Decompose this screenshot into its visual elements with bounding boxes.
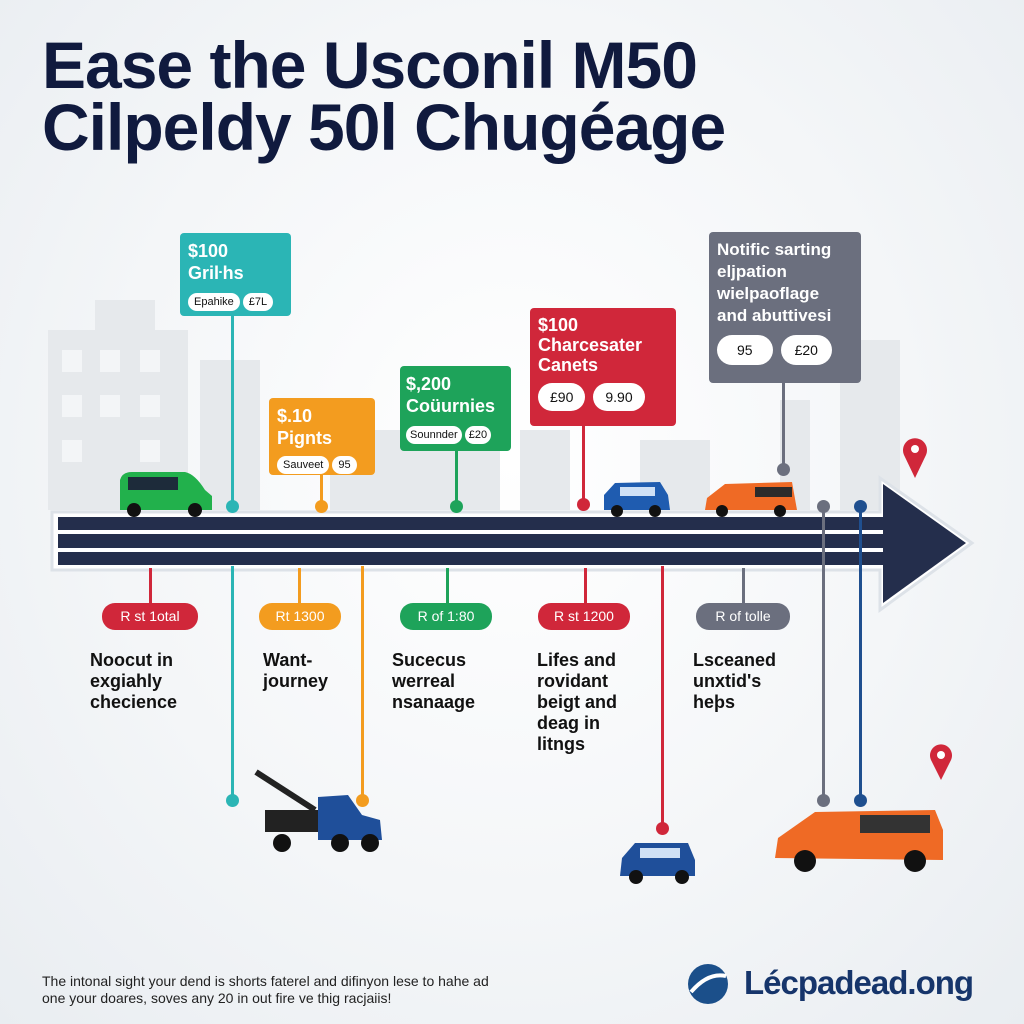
labels	[102, 603, 198, 630]
callout: teal: Epahike	[194, 296, 234, 308]
callout: red: $100	[538, 315, 578, 335]
footer text	[42, 973, 489, 1006]
text: deag in	[537, 713, 600, 733]
text: R of 1:80	[418, 608, 474, 624]
callout: green: $,200	[406, 374, 451, 394]
icon: orange van bottom	[775, 810, 943, 872]
footer text: one your doares, soves any 20 in out fire ve thig racjaiis!	[42, 990, 391, 1006]
callout: red: £90	[550, 389, 573, 405]
text blocks: exgiahly	[90, 671, 162, 691]
icon: orange van	[705, 482, 797, 517]
callout: teal	[180, 233, 291, 316]
icon: map pin bottom	[930, 744, 952, 780]
callout: gray: 95	[737, 342, 753, 358]
icon: tow truck	[256, 772, 382, 852]
footer text: The intonal sight your dend is shorts faterel and difinyon lese to hahe ad	[42, 973, 489, 989]
text: Sucecus	[392, 650, 466, 670]
title: Ease the Usconil M50	[42, 28, 697, 102]
icon: green van	[120, 472, 212, 517]
text: Want-	[263, 650, 312, 670]
icon: map pin top	[903, 438, 927, 478]
callout: green: £20	[469, 429, 487, 441]
text: Lsceaned	[693, 650, 776, 670]
callout: gray: Notific sarting	[717, 240, 831, 259]
text: Lifes and	[537, 650, 616, 670]
text: journey	[263, 671, 328, 691]
text: beigt and	[537, 692, 617, 712]
callout: teal: Griŀhs	[188, 263, 244, 283]
text: R of tolle	[715, 608, 771, 624]
callout: red: Canets	[538, 355, 598, 375]
text blocks	[90, 650, 177, 712]
callout: green	[400, 366, 511, 451]
text: nsanaage	[392, 692, 475, 712]
callout: gray	[709, 232, 861, 383]
callout: green: Coüurnies	[406, 396, 495, 416]
callout: red: Charcesater	[538, 335, 642, 355]
callout: orange: $.10	[277, 406, 312, 426]
callout: gray: and abuttivesi	[717, 306, 831, 325]
road arrow	[50, 476, 974, 613]
text: litngs	[537, 734, 585, 754]
logo: Lécpadead.ong	[744, 964, 973, 1001]
text: Rt 1300	[275, 608, 325, 624]
text blocks: checience	[90, 692, 177, 712]
text: rovidant	[537, 671, 608, 691]
callout: orange: Sauveet	[283, 459, 323, 471]
icon: blue car	[604, 482, 670, 517]
text: R st 1200	[554, 608, 614, 624]
callout: orange: 95	[338, 459, 351, 471]
title: Cilpeldy 50l Chugéage	[42, 90, 725, 164]
callout: green: Sounnder	[410, 429, 458, 441]
text: werreal	[392, 671, 455, 691]
labels: R st 1otal	[120, 608, 180, 624]
callout: gray: eljpation	[717, 262, 787, 281]
callout: red: 9.90	[605, 389, 633, 405]
callout: red	[530, 308, 676, 426]
title	[42, 28, 725, 164]
icon: globe	[688, 964, 728, 1004]
text: unxtid's	[693, 671, 761, 691]
text blocks: Noocut in	[90, 650, 173, 670]
icon: blue car bottom	[620, 843, 695, 884]
callout: teal: £7L	[249, 296, 267, 308]
callout: gray: £20	[795, 342, 818, 358]
callout: gray: wielpaoflage	[717, 284, 819, 303]
callout: orange: Pignts	[277, 428, 332, 448]
stems	[231, 310, 234, 507]
text: heþs	[693, 692, 735, 712]
callout: teal: $100	[188, 241, 228, 261]
callout: orange	[269, 398, 375, 475]
